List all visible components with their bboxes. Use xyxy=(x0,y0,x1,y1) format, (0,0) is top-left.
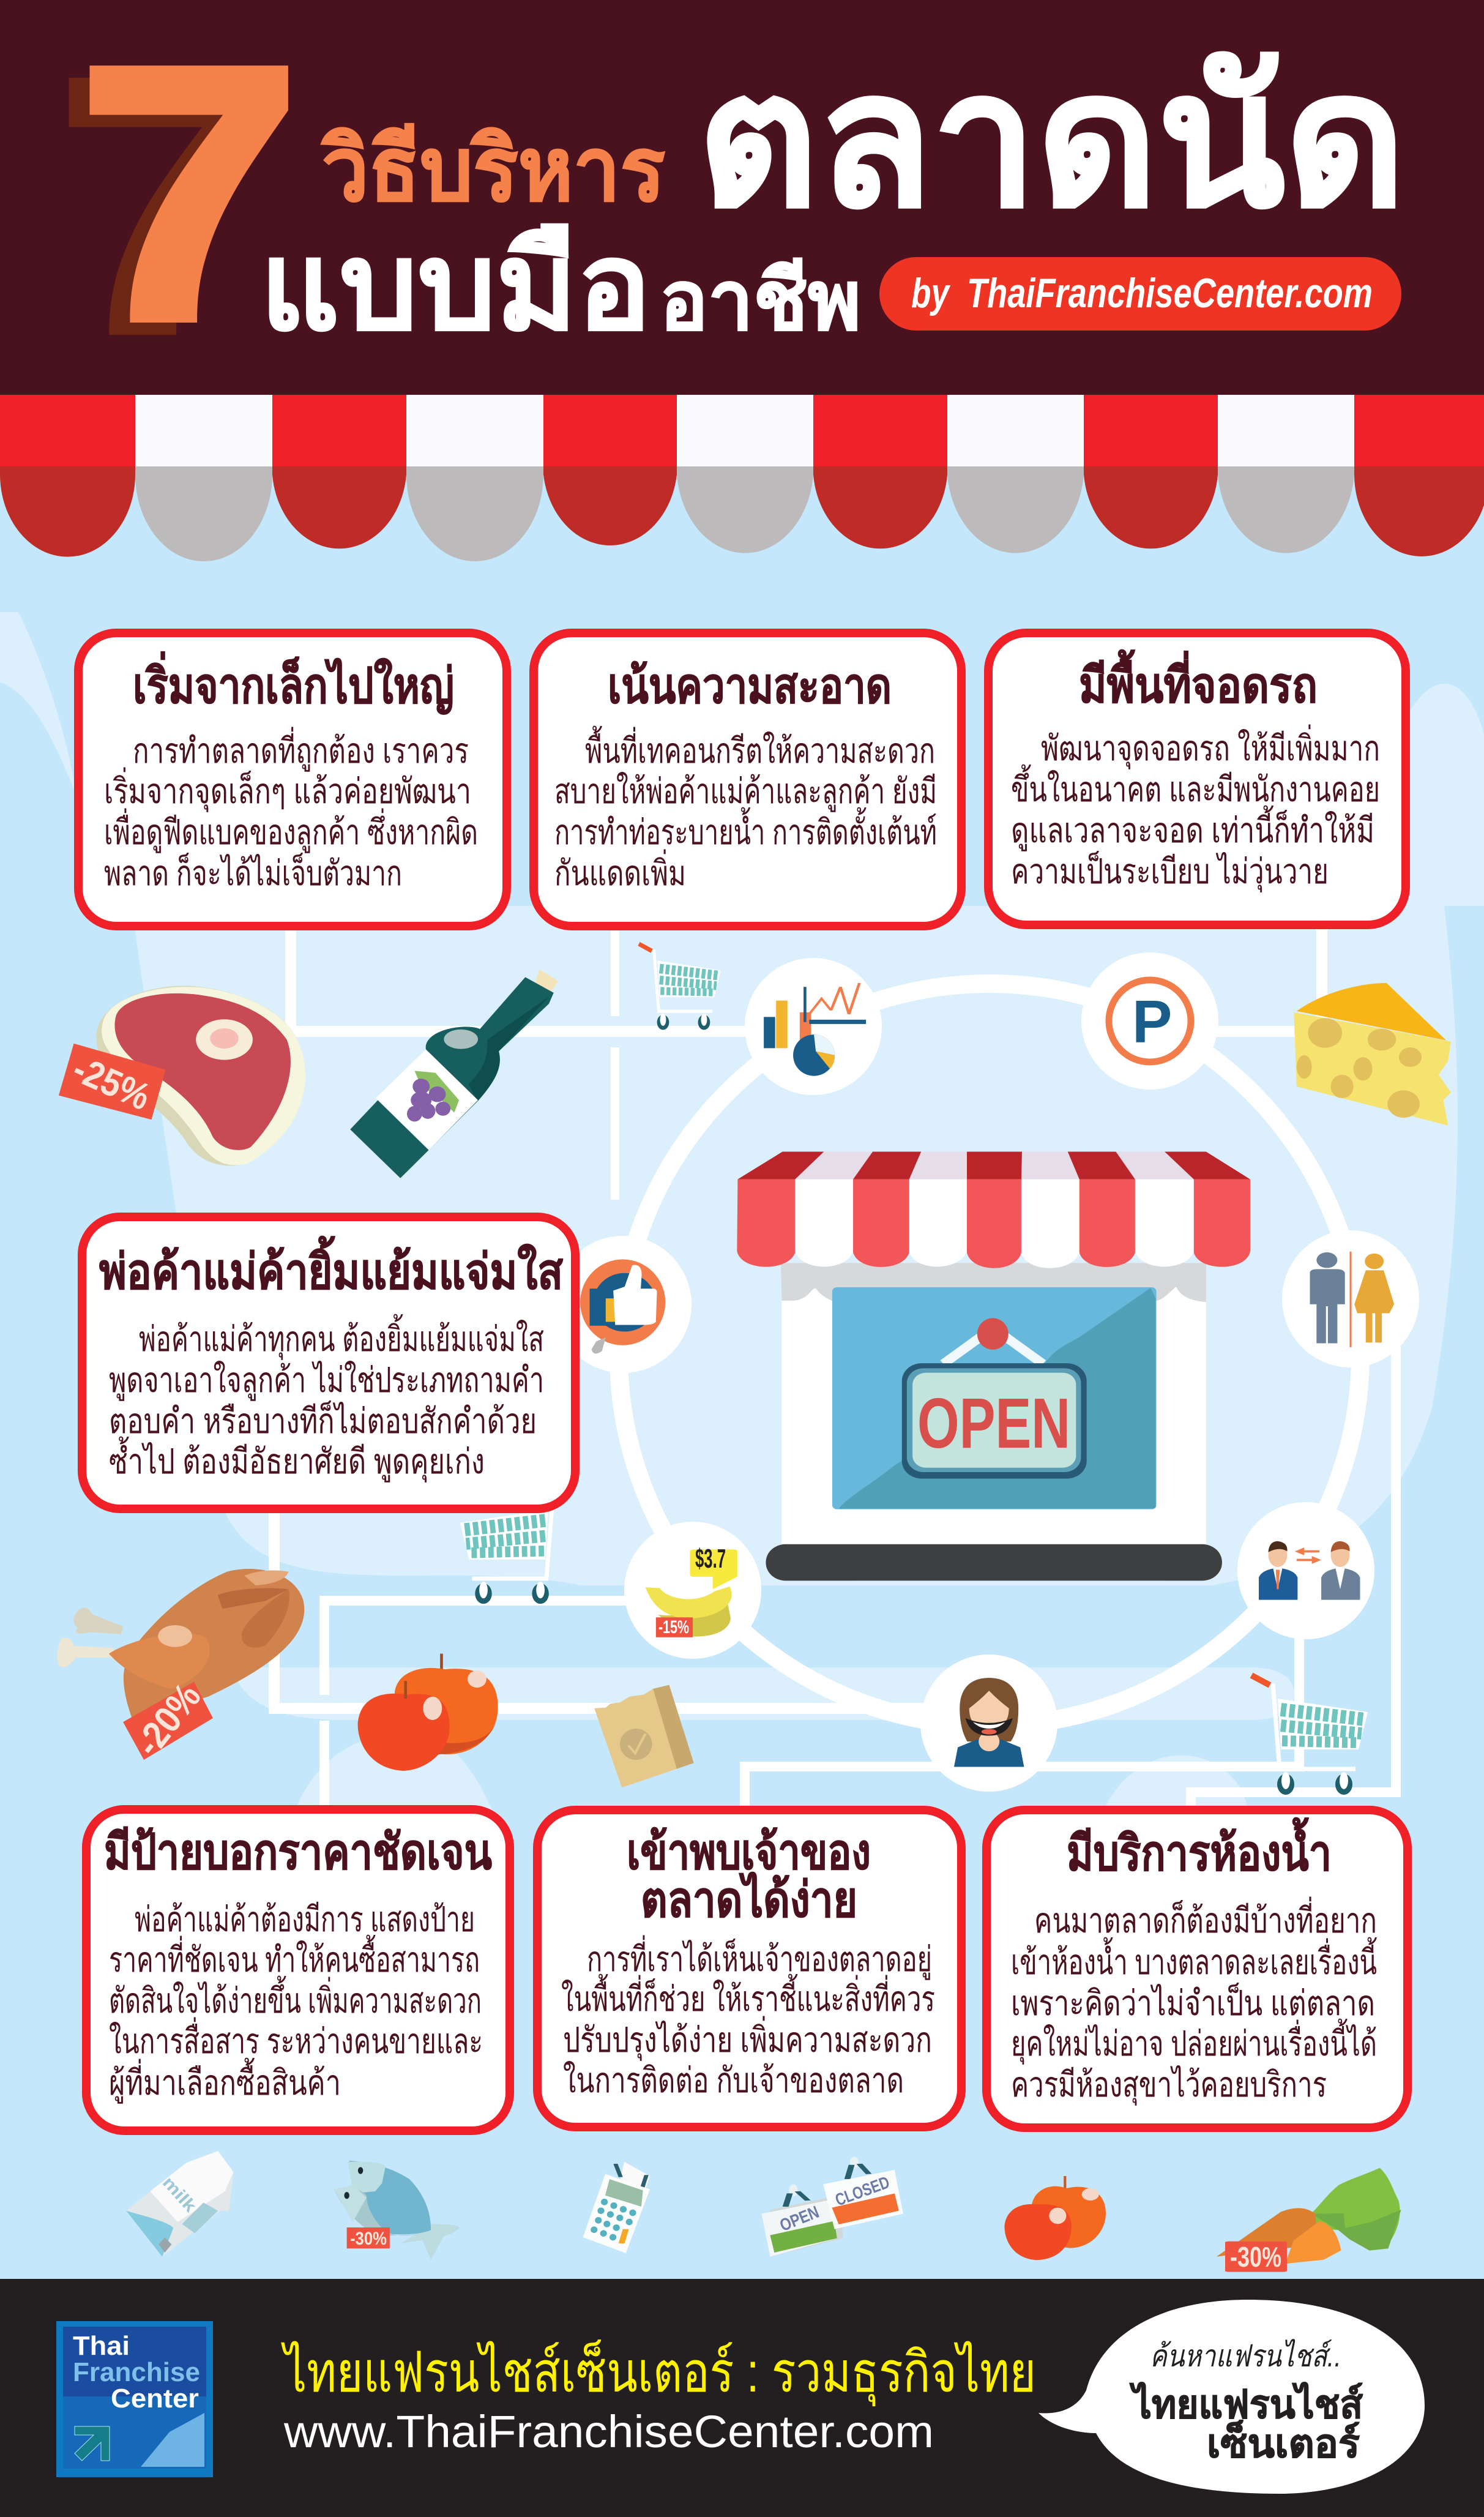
icon: market owner xyxy=(954,1678,1024,1767)
card body: ราคาที่ชัดเจน ทำให้คนซื้อสามารถ xyxy=(109,1935,480,1980)
logo book xyxy=(141,2413,204,2467)
panel: card 2 xyxy=(534,633,961,926)
panel: card 3 xyxy=(988,633,1406,925)
numeral 7 xyxy=(56,0,301,408)
illustration: fish xyxy=(334,2161,460,2260)
card body: กันแดดเพิ่ม xyxy=(554,849,686,893)
card border xyxy=(537,1810,961,2127)
sign pin xyxy=(977,1318,1009,1350)
carton art xyxy=(126,2151,233,2257)
panel: card 1 xyxy=(78,633,507,926)
awning xyxy=(0,395,1484,561)
card border xyxy=(986,1810,1408,2128)
card body: พัฒนาจุดจอดรถ ให้มีเพิ่มมาก xyxy=(1041,724,1380,770)
awning front xyxy=(795,1180,853,1266)
storefront xyxy=(737,1152,1250,1580)
panel: card 5 xyxy=(86,1809,510,2131)
card body: คนมาตลาดก็ต้องมีบ้างที่อยาก xyxy=(1034,1896,1377,1940)
store window xyxy=(832,1287,1157,1509)
card body: ความเป็นระเบียบ ไม่วุ่นวาย xyxy=(1011,850,1329,893)
card body: การทำตลาดที่ถูกต้อง เราควร xyxy=(133,727,469,772)
card body xyxy=(109,1900,483,2104)
card body: พูดจาเอาใจลูกค้า ไม่ใช่ประเภทถามคำ xyxy=(109,1360,544,1401)
card body: ซ้ำไป ต้องมีอัธยาศัยดี พูดคุยเก่ง xyxy=(109,1437,485,1483)
tag text: -30% xyxy=(350,2229,387,2249)
card heading: เน้นความสะอาด xyxy=(608,659,892,713)
card body: ปรับปรุงได้ง่าย เพิ่มความสะดวก xyxy=(563,2016,932,2062)
subtitle: วิธีบริหาร xyxy=(321,120,665,219)
logo text: Thai xyxy=(73,2331,130,2361)
market ring xyxy=(619,984,1360,1726)
logo: Center xyxy=(111,2384,199,2414)
panel: card 4 xyxy=(82,1217,575,1509)
awning stripes xyxy=(0,395,1484,467)
numeral text: 7 xyxy=(77,0,301,395)
discount tag text: -25% xyxy=(67,1048,157,1118)
connector lines xyxy=(274,924,1396,1812)
bubble shape xyxy=(1038,2300,1425,2494)
window shade xyxy=(839,1288,1155,1509)
card heading: มีป้ายบอกราคาชัดเจน xyxy=(104,1825,492,1879)
meat art xyxy=(59,986,305,1166)
card heading: มีพื้นที่จอดรถ xyxy=(1079,649,1318,712)
banana art xyxy=(646,1549,737,1637)
panel: card 6 xyxy=(537,1810,961,2127)
logo arrow xyxy=(75,2426,110,2461)
cart 3 xyxy=(1251,1675,1368,1795)
card body: ควรมีห้องสุขาไว้คอยบริการ xyxy=(1011,2065,1327,2106)
card body: พ่อค้าแม่ค้าต้องมีการ แสดงป้าย xyxy=(135,1900,475,1939)
illustration: calculator xyxy=(583,2162,650,2253)
card body: เริ่มจากจุดเล็กๆ แล้วค่อยพัฒนา xyxy=(104,767,471,813)
card body: เพื่อดูฟีดแบคของลูกค้า ซึ่งหากผิด xyxy=(104,808,478,853)
card body xyxy=(561,1935,935,2100)
awning top xyxy=(737,1152,1250,1180)
logo frame xyxy=(56,2321,213,2477)
counter xyxy=(766,1544,1222,1580)
cart 1 xyxy=(639,944,721,1030)
card body: ในการสื่อสาร ระหว่างคนขายและ xyxy=(109,2017,483,2061)
illustration: wine bottle xyxy=(350,970,558,1178)
hanger xyxy=(944,1333,1043,1364)
illustration: apples xyxy=(358,1654,498,1771)
panel: card 7 xyxy=(986,1810,1408,2128)
card body: พ่อค้าแม่ค้าทุกคน ต้องยิ้มแย้มแจ่มใส xyxy=(139,1314,544,1361)
card body: ตอบคำ หรือบางทีก็ไม่ตอบสักคำด้วย xyxy=(109,1400,537,1441)
vegetable art xyxy=(1217,2168,1401,2272)
card body: ผู้ที่มาเลือกซื้อสินค้า xyxy=(109,2058,341,2104)
card heading xyxy=(627,1825,871,1927)
header band xyxy=(0,0,1484,395)
by-line pill xyxy=(879,257,1401,331)
illustration: cheese xyxy=(1294,983,1451,1126)
card body: เพราะคิดว่าไม่จำเป็น แต่ตลาด xyxy=(1011,1982,1375,2023)
sign face xyxy=(912,1373,1076,1468)
illustration: open and closed signs xyxy=(761,2156,903,2257)
logo panel xyxy=(63,2327,206,2469)
carton label: milk xyxy=(159,2173,200,2216)
card body: ตัดสินใจได้ง่ายขึ้น เพิ่มความสะดวก xyxy=(109,1976,482,2021)
numeral shadow: 7 xyxy=(56,4,280,408)
open text: OPEN xyxy=(917,1383,1070,1463)
icon: parking xyxy=(1109,980,1191,1062)
pill site name: ThaiFranchiseCenter.com xyxy=(967,270,1373,316)
footer band xyxy=(0,2279,1484,2517)
title word small: อาชีพ xyxy=(660,255,861,347)
card heading: เริ่มจากเล็กไปใหญ่ xyxy=(133,651,454,714)
card body xyxy=(104,727,478,893)
card body: ขึ้นในอนาคต และมีพนักงานคอย xyxy=(1011,765,1380,809)
card body: การที่เราได้เห็นเจ้าของตลาดอยู่ xyxy=(587,1935,932,1980)
illustration: meat xyxy=(59,986,305,1166)
illustration: paper bag xyxy=(594,1685,694,1787)
store wall xyxy=(782,1263,1206,1548)
card heading: มีบริการห้องน้ำ xyxy=(1067,1817,1332,1880)
main title: ตลาดนัด xyxy=(698,36,1406,244)
icon: restroom xyxy=(1310,1252,1394,1347)
logo: Franchise xyxy=(73,2357,200,2387)
discount tag text: -20% xyxy=(127,1675,209,1764)
card body: ในพื้นที่ก็ช่วย ให้เราชี้แนะสิ่งที่ควร xyxy=(561,1974,935,2019)
title line 1 xyxy=(321,36,1406,244)
parking letter: P xyxy=(1132,988,1172,1055)
card border xyxy=(78,633,507,926)
icon: bananas xyxy=(646,1544,737,1637)
card body xyxy=(1011,724,1380,893)
card heading: ตลาดได้ง่าย xyxy=(641,1871,857,1927)
price text: $3.7 xyxy=(695,1544,726,1574)
fish art xyxy=(334,2161,460,2260)
title line 2 xyxy=(260,219,861,355)
cart 2 xyxy=(460,1487,574,1604)
open label: OPEN xyxy=(777,2202,822,2235)
icon: shop owners xyxy=(1259,1541,1360,1600)
title word: แบบมือ xyxy=(260,219,651,355)
icon: thumbs up xyxy=(580,1259,665,1353)
illustration: roast chicken xyxy=(58,1569,304,1764)
closed label: CLOSED xyxy=(833,2172,892,2210)
card body: ในการติดต่อ กับเจ้าของตลาด xyxy=(563,2060,904,2100)
store art xyxy=(737,1152,1250,1580)
card body: พื้นที่เทคอนกรีตให้ความสะดวก xyxy=(585,726,935,771)
card body: สบายให้พ่อค้าแม่ค้าและลูกค้า ยังมี xyxy=(554,771,937,812)
store valance xyxy=(781,1263,1206,1302)
signs art xyxy=(761,2156,903,2257)
card border xyxy=(82,1217,575,1509)
card border xyxy=(534,633,961,926)
card heading: เข้าพบเจ้าของ xyxy=(627,1825,871,1879)
speech bubble: เซ็นเตอร์ xyxy=(1207,2420,1360,2466)
card body: พลาด ก็จะได้ไม่เจ็บตัวมาก xyxy=(104,852,402,893)
footer slogan: ไทยแฟรนไชส์เซ็นเตอร์ : รวมธุรกิจไทย xyxy=(280,2339,1036,2407)
illustration: apples small xyxy=(1004,2176,1106,2260)
logo xyxy=(56,2321,213,2477)
discount text: -15% xyxy=(658,1617,689,1637)
bubble caption: ค้นหาแฟรนไชส์.. xyxy=(1150,2339,1341,2373)
parking ring xyxy=(1109,980,1191,1062)
sign frame xyxy=(902,1363,1087,1479)
node circles xyxy=(554,952,1419,1792)
pill text: by xyxy=(911,270,950,316)
card body xyxy=(1011,1896,1377,2106)
icon: chart xyxy=(764,983,866,1076)
pill xyxy=(879,257,1401,331)
bubble name: ไทยแฟรนไชส์ xyxy=(1129,2382,1363,2426)
card body: ดูแลเวลาจะจอด เท่านี้ก็ทำให้มี xyxy=(1011,806,1374,851)
card border xyxy=(988,633,1406,925)
card body xyxy=(109,1314,544,1483)
card body xyxy=(554,726,937,893)
illustration: milk carton xyxy=(126,2151,233,2257)
tag text: -30% xyxy=(1230,2241,1281,2273)
speech bubble xyxy=(1038,2300,1425,2494)
chicken art xyxy=(58,1569,304,1760)
footer url: www.ThaiFranchiseCenter.com xyxy=(283,2406,934,2457)
background pattern xyxy=(0,612,1484,1898)
card heading: พ่อค้าแม่ค้ายิ้มแย้มแจ่มใส xyxy=(99,1236,563,1299)
card border xyxy=(86,1809,510,2131)
illustration: vegetables xyxy=(1217,2168,1401,2273)
awning scallops xyxy=(0,466,1484,561)
card body: การทำท่อระบายน้ำ การติดตั้งเต้นท์ xyxy=(554,807,937,852)
